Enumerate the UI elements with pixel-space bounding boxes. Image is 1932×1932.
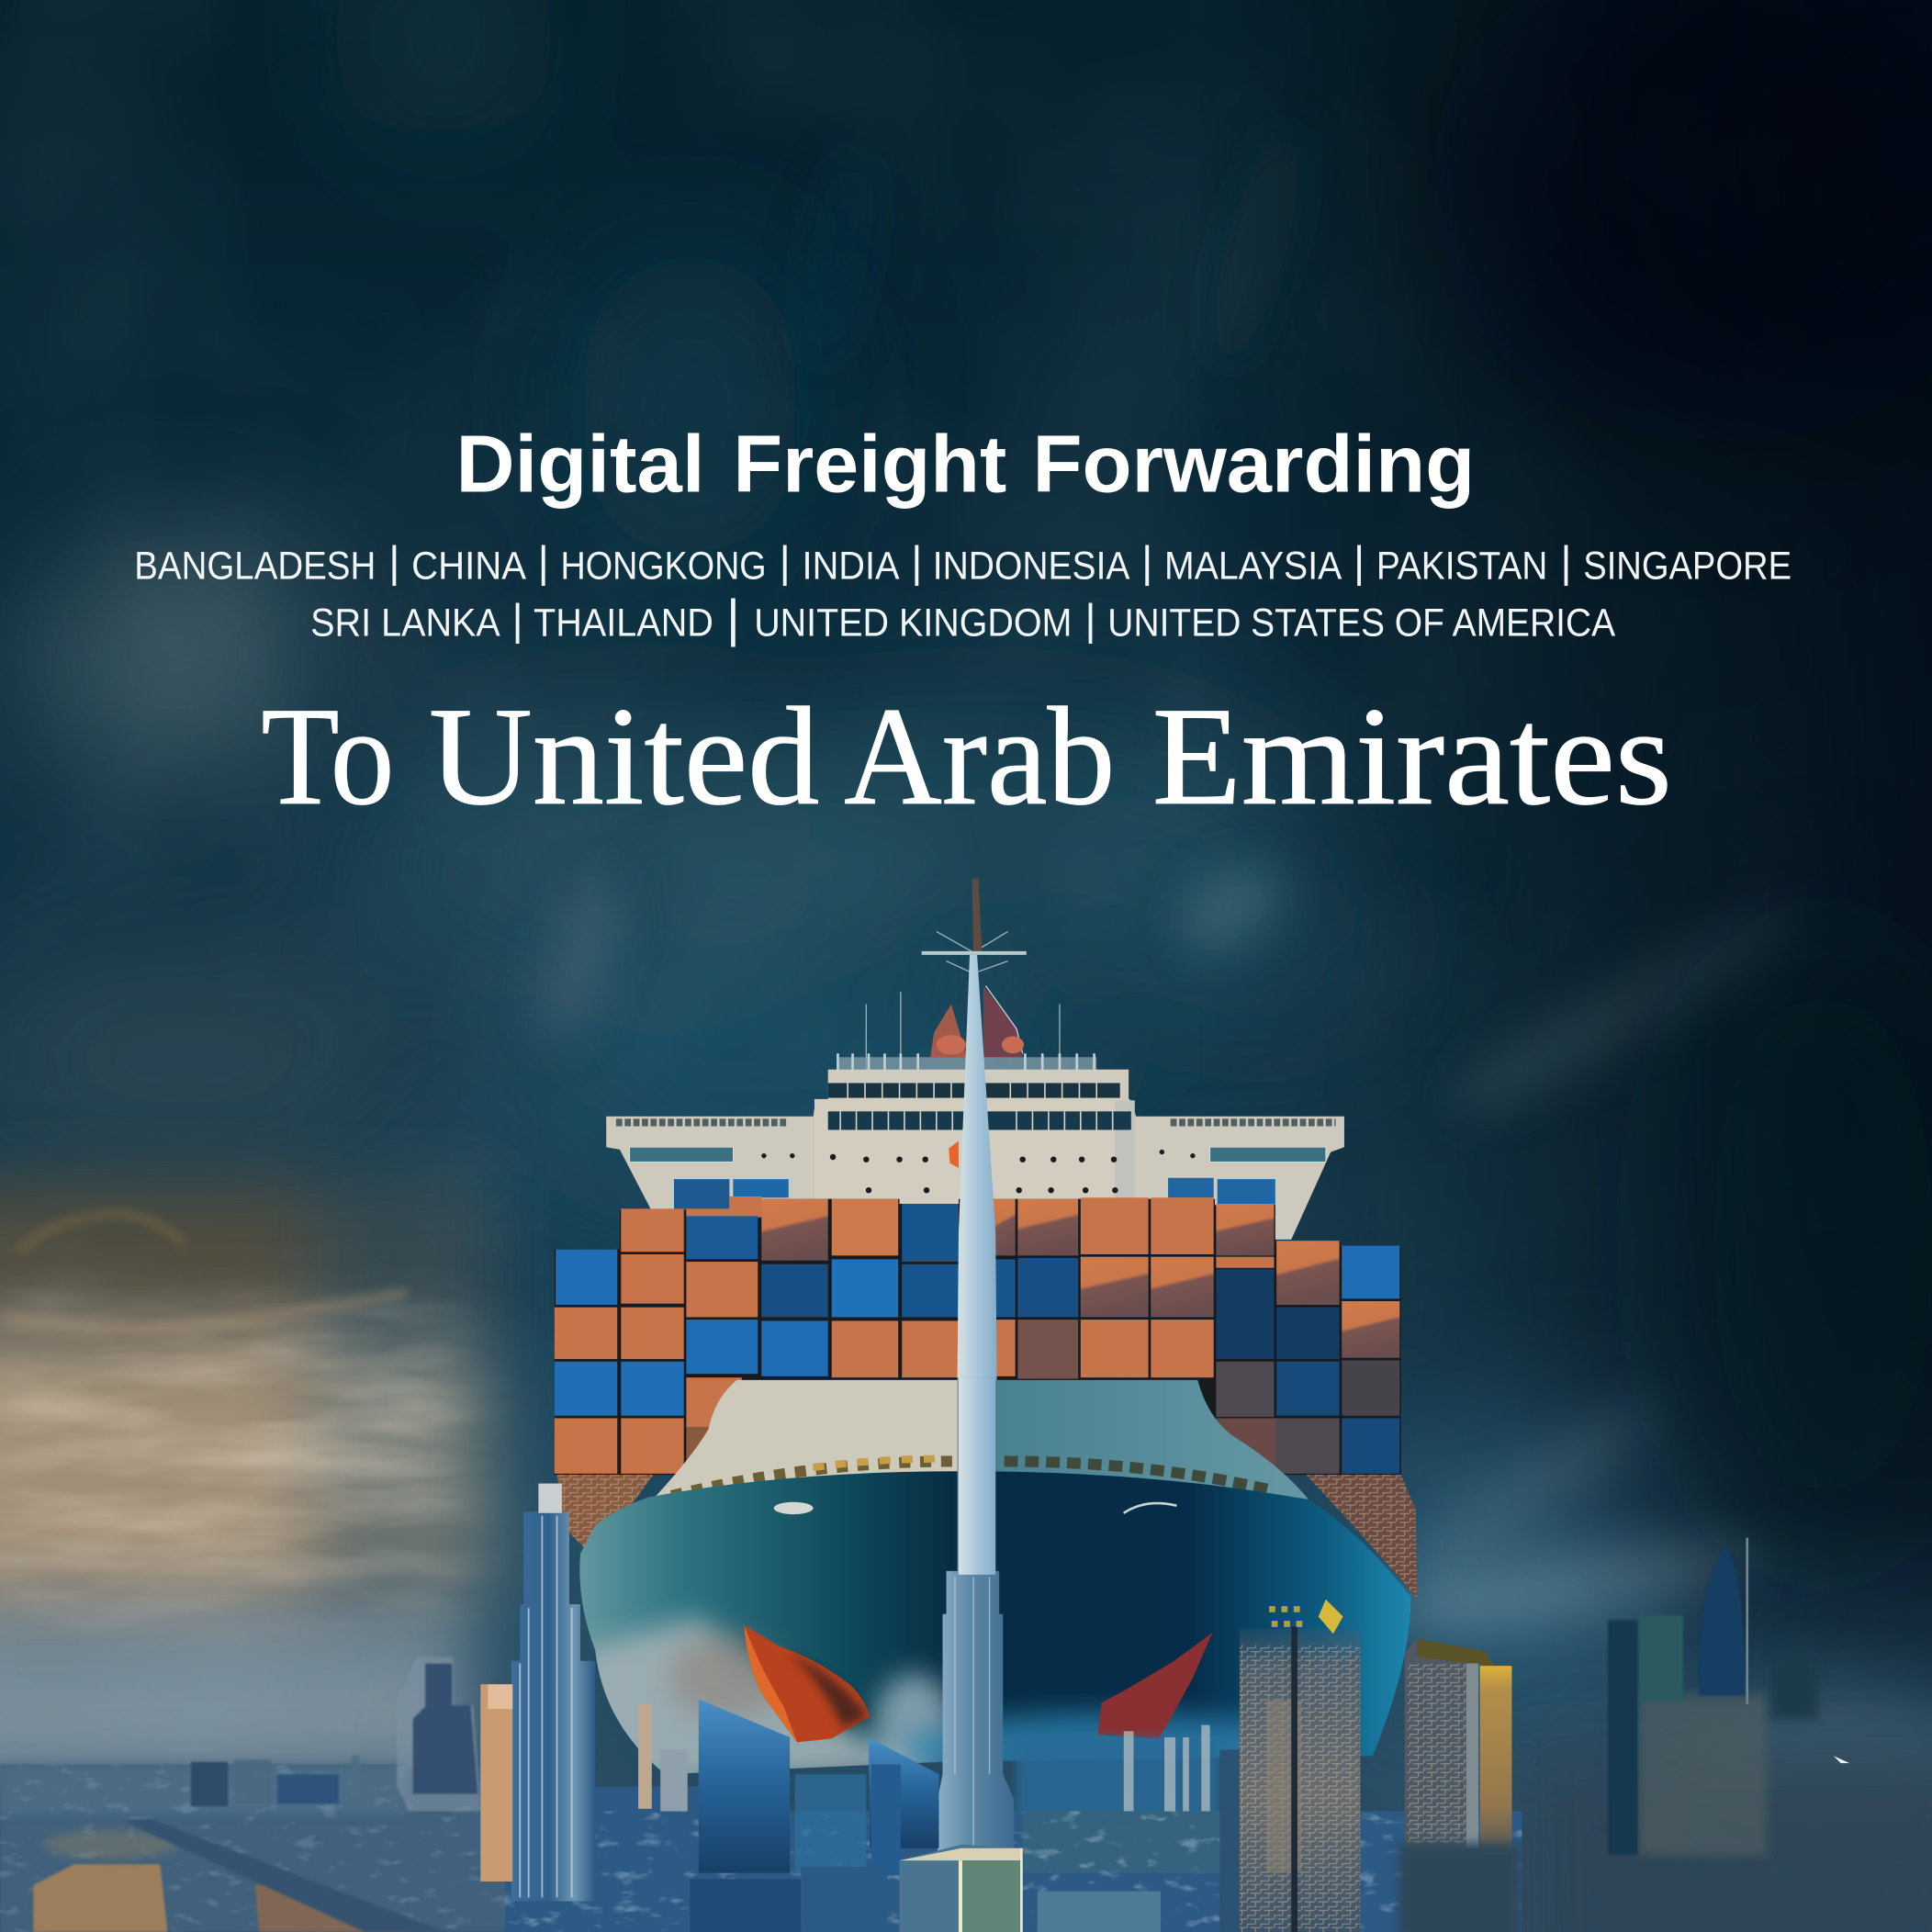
- column H: [1017, 1199, 1078, 1379]
- container stack: [555, 1196, 1401, 1475]
- burj tower left: [511, 1484, 595, 1901]
- column I: [1081, 1197, 1149, 1377]
- countries line 1: HONGKONG: [561, 545, 767, 589]
- countries line 2: [310, 589, 1615, 646]
- countries line 2: UNITED KINGDOM: [754, 601, 1072, 645]
- countries line 1: |: [911, 537, 922, 586]
- box building bottom centre: [900, 1845, 1023, 1932]
- countries line 2: UNITED STATES OF AMERICA: [1107, 601, 1615, 645]
- title: Freight: [733, 418, 1006, 509]
- countries line 2: SRI LANKA: [310, 601, 500, 645]
- low buildings: [191, 1657, 480, 1811]
- column L: [1276, 1241, 1340, 1474]
- countries line 1: CHINA: [411, 545, 526, 589]
- hull: [567, 1466, 1430, 1787]
- countries line 1: MALAYSIA: [1164, 545, 1342, 589]
- city base: [505, 1787, 1522, 1932]
- funnel and flag: [930, 985, 1024, 1057]
- column D: [761, 1199, 828, 1376]
- column E: [832, 1199, 898, 1377]
- countries line 2: |: [511, 595, 523, 644]
- countries line 2: |: [1084, 595, 1096, 644]
- wing railing: [616, 1119, 1336, 1125]
- countries line 1: |: [1141, 537, 1152, 586]
- patterned lower containers: [557, 1475, 1417, 1600]
- warm storm clouds: [0, 1183, 493, 1780]
- destination heading: Emirates: [1152, 680, 1672, 835]
- column A: [555, 1250, 617, 1474]
- superstructure: [606, 1053, 1344, 1240]
- left bow red patch: [744, 1625, 870, 1742]
- column M: [1342, 1246, 1399, 1474]
- countries line 1: |: [1354, 537, 1365, 586]
- tan terrain patches: [33, 1830, 413, 1932]
- glass towers centre left: [638, 1699, 938, 1875]
- cloud texture: [0, 1280, 488, 1629]
- bow deck: [646, 1380, 1309, 1506]
- mast rigging: [866, 931, 1060, 1084]
- ground and distant city left: [0, 1657, 530, 1932]
- mast: [922, 879, 1027, 1380]
- countries line 1: [134, 537, 1792, 589]
- column J: [1151, 1197, 1214, 1377]
- column F: [902, 1204, 959, 1377]
- right bow red patch: [1098, 1633, 1212, 1738]
- orange marker: [949, 1141, 959, 1168]
- teal wisps: [0, 0, 1688, 1676]
- countries line 1: |: [1560, 537, 1572, 586]
- stack shadow backing: [555, 1199, 1401, 1475]
- column K: [1216, 1204, 1274, 1417]
- column B: [621, 1208, 684, 1474]
- destination heading: To: [261, 680, 394, 835]
- gold crown: [1269, 1609, 1309, 1624]
- burj tower centre: [938, 1377, 1014, 1860]
- column C: [686, 1216, 758, 1427]
- countries line 1: INDIA: [803, 545, 900, 589]
- destination heading: [261, 680, 1672, 835]
- bridge rail: [837, 1053, 1095, 1072]
- portholes: [761, 1150, 1196, 1193]
- column G: [989, 1199, 1016, 1376]
- distant hazy skyline right: [1515, 1538, 1932, 1932]
- countries line 1: |: [388, 537, 399, 586]
- destination heading: United: [429, 680, 819, 835]
- pale lower left reflection: [579, 1616, 949, 1787]
- title: Forwarding: [1032, 418, 1475, 509]
- countries line 2: |: [726, 589, 740, 646]
- gold name marks: [671, 1461, 955, 1496]
- bridge windows: [828, 1083, 1131, 1129]
- countries line 1: |: [538, 537, 549, 586]
- countries line 1: SINGAPORE: [1583, 545, 1792, 589]
- diagonal sky streaks: [526, 119, 1814, 1647]
- destination heading: Arab: [844, 680, 1115, 835]
- pale columns behind city right of centre: [1017, 1725, 1219, 1824]
- patterned tower and gold tower far right: [1398, 1639, 1522, 1932]
- countries line 2: THAILAND: [534, 601, 713, 645]
- white hull marks: [774, 1502, 814, 1514]
- countries line 1: INDONESIA: [933, 545, 1130, 589]
- countries line 1: BANGLADESH: [134, 545, 376, 589]
- orange partly hidden containers: [686, 1196, 1276, 1475]
- title: Digital: [455, 418, 705, 509]
- countries line 1: |: [780, 537, 791, 586]
- amber cloud edges: [0, 1214, 407, 1328]
- patterned tower right of ship: [1219, 1600, 1360, 1932]
- countries line 1: PAKISTAN: [1376, 545, 1547, 589]
- low towers bottom centre: [690, 1867, 1161, 1932]
- container ship: [134, 418, 1792, 1932]
- peach tower: [480, 1684, 512, 1881]
- upper blue containers: [674, 1178, 1275, 1216]
- title: [455, 418, 1475, 509]
